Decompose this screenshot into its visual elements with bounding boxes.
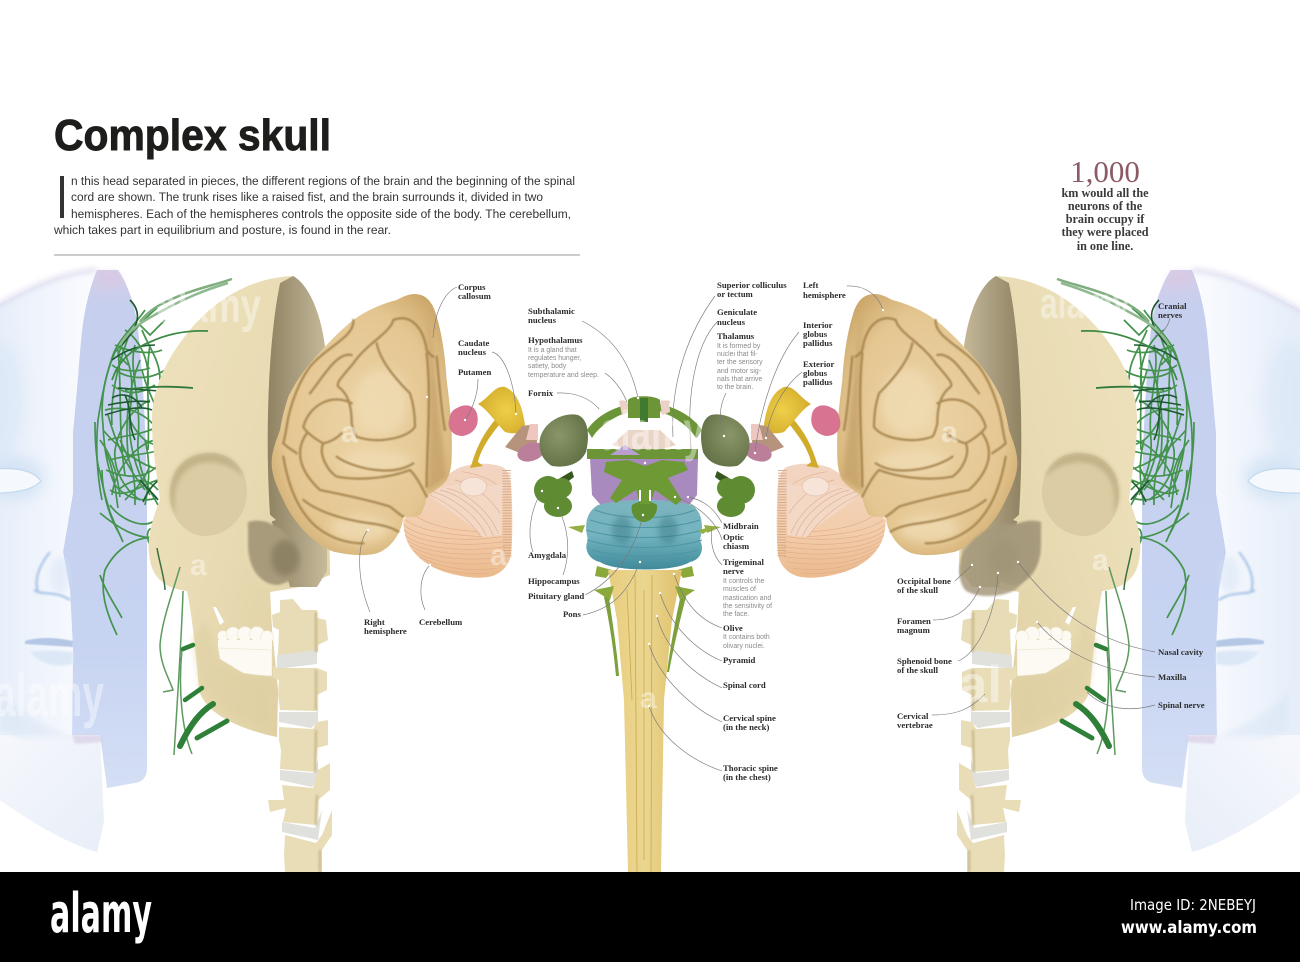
label: Trigeminal nerve: Trigeminal [723, 557, 764, 567]
label: Sphenoid bone: of the skull [897, 665, 939, 675]
pons [586, 500, 702, 570]
label: Nasal cavity: Nasal cavity [1158, 647, 1204, 657]
right skull occipital base [959, 524, 1035, 596]
label: Sphenoid bone: Sphenoid bone [897, 656, 952, 666]
label: Trigeminal nerve: It controls the [723, 578, 765, 585]
label: Trigeminal nerve: muscles of [723, 586, 756, 593]
intro text block: hemispheres. Each of the hemispheres controls the opposite side of the body. The cerebellum, [71, 207, 571, 221]
label: Cerebellum: Cerebellum [419, 617, 463, 627]
label: Caudate nucleus: nucleus [458, 347, 487, 357]
label: Pyramid: Pyramid [723, 655, 756, 665]
label: Trigeminal nerve [723, 557, 772, 618]
stock watermarks: alamy [1040, 279, 1130, 328]
label: Hypothalamus: regulates hunger, [528, 355, 581, 362]
label: Trigeminal nerve: mastication and [723, 595, 771, 602]
stock watermarks: al [958, 656, 1002, 714]
stock watermarks: alamy [600, 399, 704, 462]
label: Thalamus: Thalamus [717, 331, 755, 341]
label: Thoracic spine: (in the chest) [723, 772, 771, 782]
leader lines [360, 286, 1170, 771]
label: Cranial nerves: nerves [1158, 310, 1183, 320]
label: Right hemisphere: hemisphere [364, 626, 407, 636]
optic chiasm [632, 501, 657, 522]
drop cap [60, 176, 64, 218]
label: Thalamus: to the brain. [717, 384, 753, 391]
label: Hypothalamus [528, 335, 599, 379]
label: Geniculate nucleus: Geniculate [717, 307, 757, 317]
label: Thalamus: nals that arrive [717, 376, 762, 383]
label: Fornix: Fornix [528, 388, 554, 398]
stock watermarks: a [1092, 544, 1109, 577]
callout: 1,000 km of neurons: brain occupy if [1066, 212, 1145, 226]
label: Foramen magnum: magnum [897, 625, 931, 635]
label: Exterior globus pallidus: globus [803, 368, 828, 378]
stock watermarks: a [941, 416, 958, 449]
label: Interior globus pallidus: Interior [803, 320, 832, 330]
intro text block: cord are shown. The trunk rises like a raised fist, and the brain surrounds it, divided in two [71, 190, 543, 204]
stock watermarks: alamy [157, 280, 261, 333]
label: Olive: olivary nuclei. [723, 643, 765, 650]
label: Caudate nucleus: Caudate [458, 338, 489, 348]
label: Hippocampus: Hippocampus [528, 576, 580, 586]
label: Spinal nerve: Spinal nerve [1158, 700, 1205, 710]
left basal ganglia group [449, 387, 633, 578]
label: Hypothalamus: satiety, body [528, 363, 567, 370]
label: Thalamus: and motor sig- [717, 368, 761, 375]
callout: 1,000 km of neurons: 1,000 [1070, 154, 1140, 189]
stock watermarks: a [490, 539, 507, 572]
label: Trigeminal nerve: the face. [723, 611, 750, 618]
central brainstem [586, 396, 712, 872]
intro text block: which takes part in equilibrium and posture, is found in the rear. [53, 223, 391, 237]
label: Optic chiasm: chiasm [723, 541, 750, 551]
label: Thalamus: nuclei that fil- [717, 351, 758, 358]
intro text block: n this head separated in pieces, the different regions of the brain and the beginning of the spinal [71, 174, 575, 188]
callout: 1,000 km of neurons: km would all the [1061, 186, 1149, 200]
callout: 1,000 km of neurons: neurons of the [1068, 199, 1143, 213]
label: Geniculate nucleus: nucleus [717, 317, 746, 327]
label: Occipital bone: of the skull [897, 585, 939, 595]
label: Olive [723, 623, 770, 650]
label: Spinal cord: Spinal cord [723, 680, 766, 690]
footer logo: alamy [50, 882, 152, 945]
label: Pituitary gland: Pituitary gland [528, 591, 584, 601]
callout: 1,000 km of neurons [1061, 154, 1149, 253]
label: Cervical spine: (in the neck) [723, 722, 769, 732]
intro text block [53, 174, 575, 237]
label: Thalamus: It is formed by [717, 343, 761, 350]
label: Superior colliculus: Superior colliculus [717, 280, 787, 290]
label: Subthalamic nucleus: nucleus [528, 315, 557, 325]
stock watermarks: a [640, 682, 657, 715]
footer bar [0, 872, 1300, 962]
right head, skull, spine, brain and cerebellum [777, 270, 1300, 872]
fornix column [628, 396, 660, 418]
label: Corpus callosum: Corpus [458, 282, 486, 292]
title: Complex skull [54, 111, 331, 160]
label: Trigeminal nerve: nerve [723, 566, 744, 576]
label: Foramen magnum: Foramen [897, 616, 931, 626]
olive side strips [604, 590, 619, 676]
label dots [367, 309, 1038, 707]
green star structure [604, 460, 688, 505]
label: Hypothalamus: It is a gland that [528, 347, 577, 354]
label: Maxilla: Maxilla [1158, 672, 1187, 682]
label: Cervical vertebrae: vertebrae [897, 720, 933, 730]
label: Thalamus: ter the sensory [717, 359, 763, 366]
label: Trigeminal nerve: the sensitivity of [723, 603, 772, 610]
label: Putamen: Putamen [458, 367, 491, 377]
label: Right hemisphere: Right [364, 617, 385, 627]
right basal ganglia group [656, 387, 840, 578]
label: Superior colliculus: or tectum [717, 289, 754, 299]
label: Olive: Olive [723, 623, 743, 633]
stock watermarks [0, 279, 1130, 729]
label: Amygdala: Amygdala [528, 550, 567, 560]
footer bar: www.alamy.com [1121, 918, 1257, 937]
left head, skull, spine, brain and cerebellum [0, 270, 512, 872]
label: Cranial nerves: Cranial [1158, 301, 1186, 311]
label: Interior globus pallidus: pallidus [803, 338, 833, 348]
label: Interior globus pallidus: globus [803, 329, 828, 339]
callout: 1,000 km of neurons: in one line. [1077, 239, 1133, 253]
label: Olive: It contains both [723, 634, 770, 641]
label: Pons: Pons [563, 609, 581, 619]
image id and site: Image ID: 2NEBEYJ [1130, 896, 1256, 914]
label: Hypothalamus: temperature and sleep. [528, 372, 599, 379]
label: Left hemisphere: hemisphere [803, 290, 846, 300]
label: Occipital bone: Occipital bone [897, 576, 951, 586]
stock watermarks: a [341, 416, 358, 449]
label: Left hemisphere: Left [803, 280, 818, 290]
midbrain [590, 458, 698, 510]
label: Thalamus [717, 331, 763, 391]
label: Corpus callosum: callosum [458, 291, 492, 301]
callout: 1,000 km of neurons: they were placed [1061, 225, 1149, 239]
label: Hypothalamus: Hypothalamus [528, 335, 583, 345]
spinal cord [608, 570, 682, 872]
label: Midbrain: Midbrain [723, 521, 759, 531]
label: Thoracic spine: Thoracic spine [723, 763, 778, 773]
label: Optic chiasm: Optic [723, 532, 744, 542]
stock watermarks: a [190, 549, 207, 582]
label: Exterior globus pallidus: Exterior [803, 359, 834, 369]
label: Cervical vertebrae: Cervical [897, 711, 928, 721]
label: Exterior globus pallidus: pallidus [803, 377, 833, 387]
label: Cervical spine: Cervical spine [723, 713, 776, 723]
label: Subthalamic nucleus: Subthalamic [528, 306, 575, 316]
